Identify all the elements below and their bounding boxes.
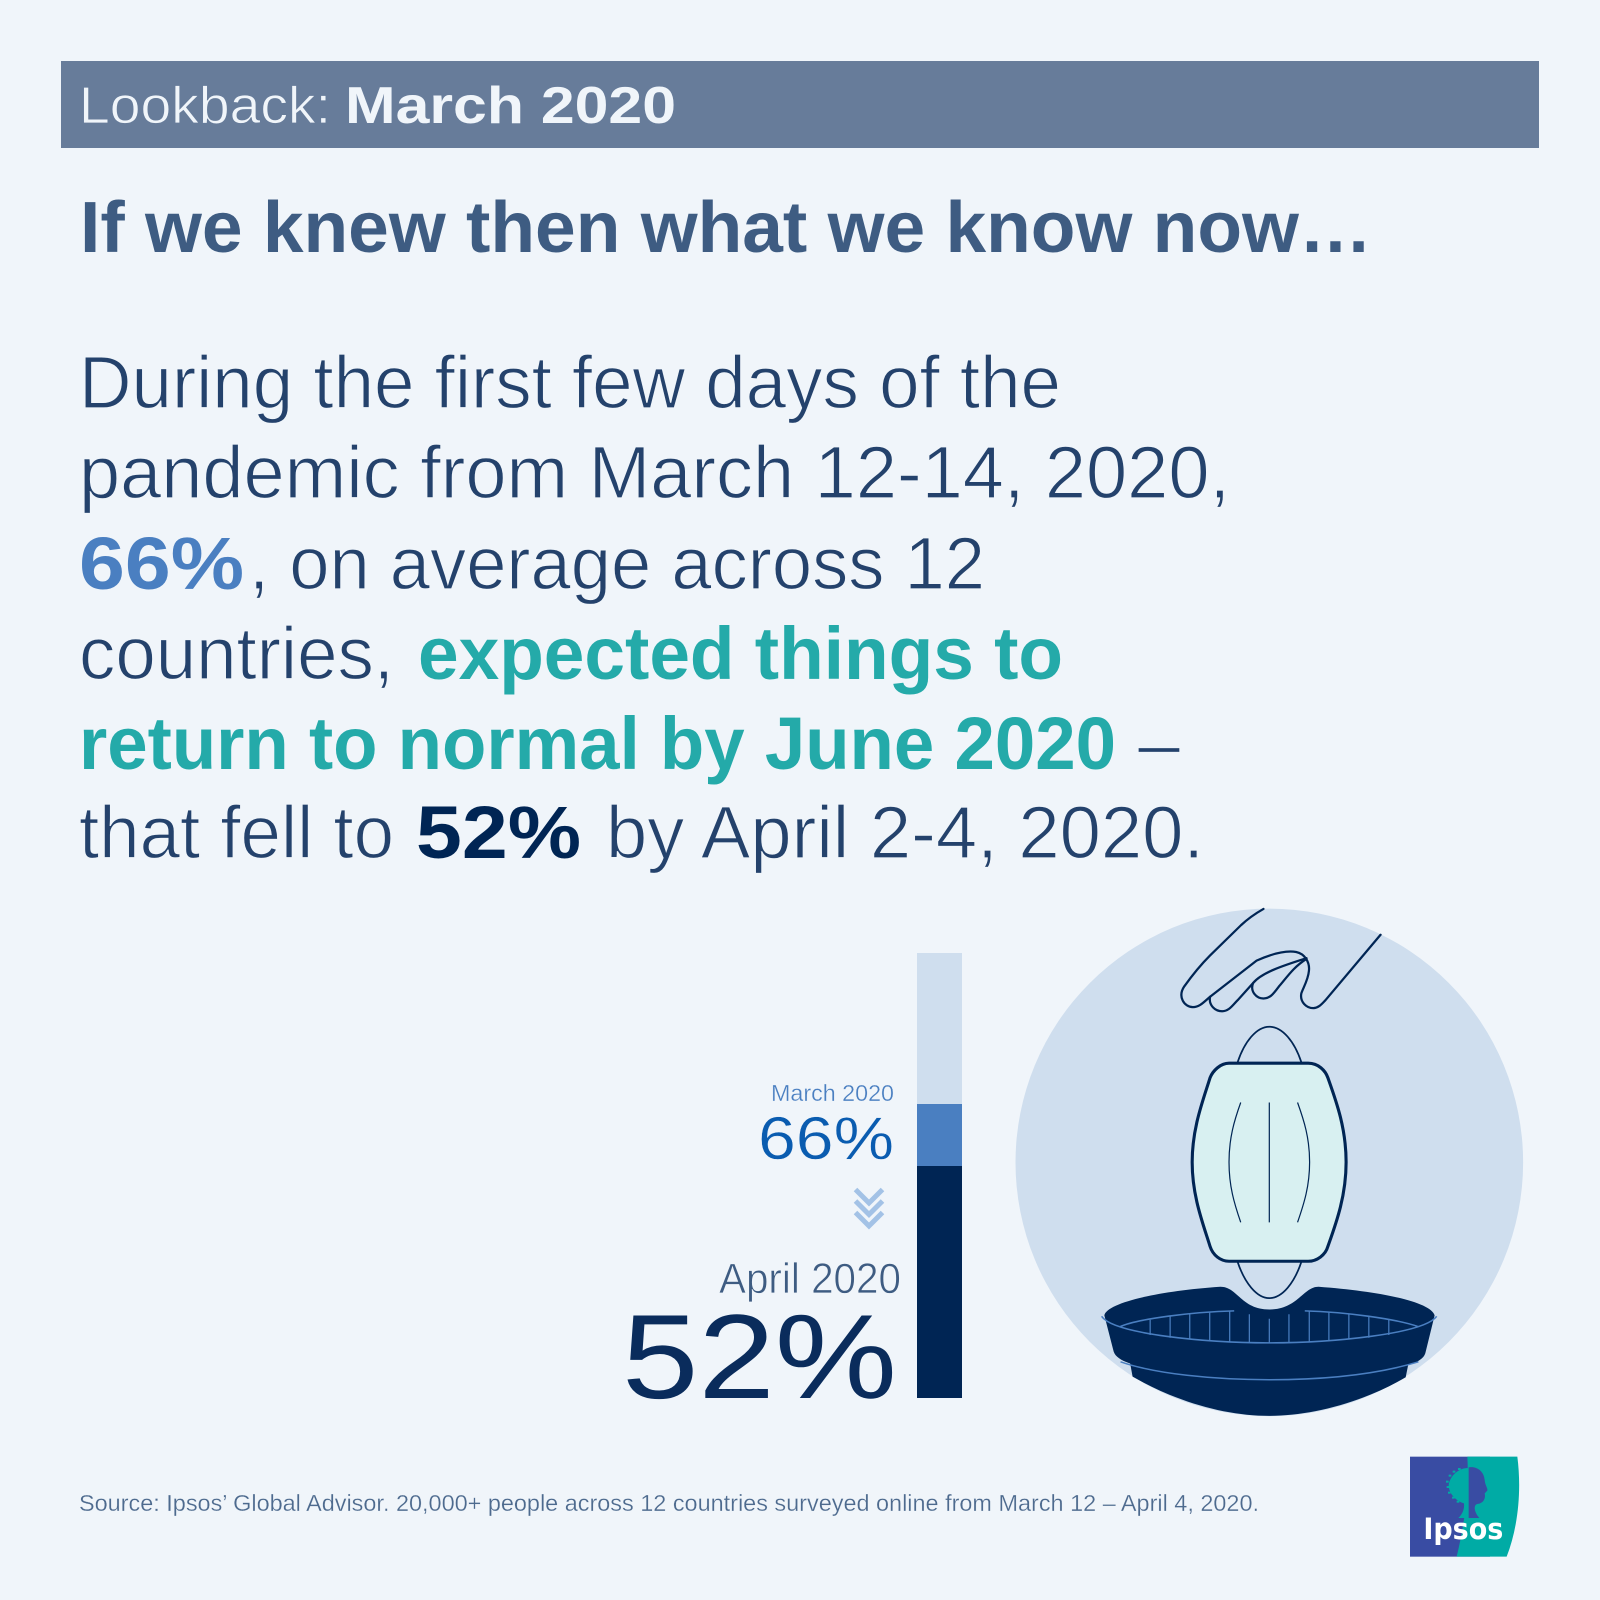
label: April 2020 52% [622, 1255, 901, 1424]
logo: Ipsos: Ipsos [1423, 1512, 1503, 1546]
heading: If we knew then what we know now… [80, 188, 1372, 268]
bin [1102, 1287, 1437, 1416]
label: March 2020 66%: 66% [758, 1105, 894, 1172]
label: March 2020 66% [758, 1080, 894, 1172]
source note: Source: Ipsos’ Global Advisor. 20,000+ people across 12 countries surveyed online from March 12 – April 4, 2020. [79, 1490, 1259, 1516]
body line 6: that fell to [79, 791, 394, 874]
body line 4: countries, [79, 612, 394, 695]
header banner: Lookback: [79, 77, 331, 135]
body line 4 [79, 612, 1063, 695]
logo: Ipsos [1410, 1457, 1519, 1557]
icon: down chevrons [856, 1190, 882, 1226]
body line 6: by April 2-4, 2020. [606, 791, 1204, 874]
body line 6: 52% [416, 791, 581, 874]
mask [1192, 1027, 1346, 1298]
body line 5: return to normal by June 2020 [79, 702, 1116, 785]
hand [1181, 909, 1381, 1011]
label: April 2020 52%: 52% [622, 1290, 897, 1424]
label: April 2020 52%: April 2020 [719, 1255, 901, 1303]
stacked bar chart [917, 953, 962, 1398]
circle background [1015, 909, 1523, 1416]
label: March 2020 66%: March 2020 [771, 1080, 894, 1106]
body line 2: pandemic from March 12-14, 2020, [79, 431, 1230, 514]
body line 3: , on average across 12 [249, 522, 985, 605]
illustration: hand dropping mask into bin [1015, 909, 1523, 1416]
body line 1: During the first few days of the [79, 341, 1061, 424]
header banner [61, 61, 1539, 148]
body line 4: expected things to [418, 612, 1063, 695]
body line 5: – [1138, 702, 1181, 785]
body line 3: 66% [79, 522, 244, 605]
body paragraph [79, 341, 1230, 874]
body line 6 [79, 791, 1204, 874]
header banner: March 2020 [345, 77, 676, 135]
